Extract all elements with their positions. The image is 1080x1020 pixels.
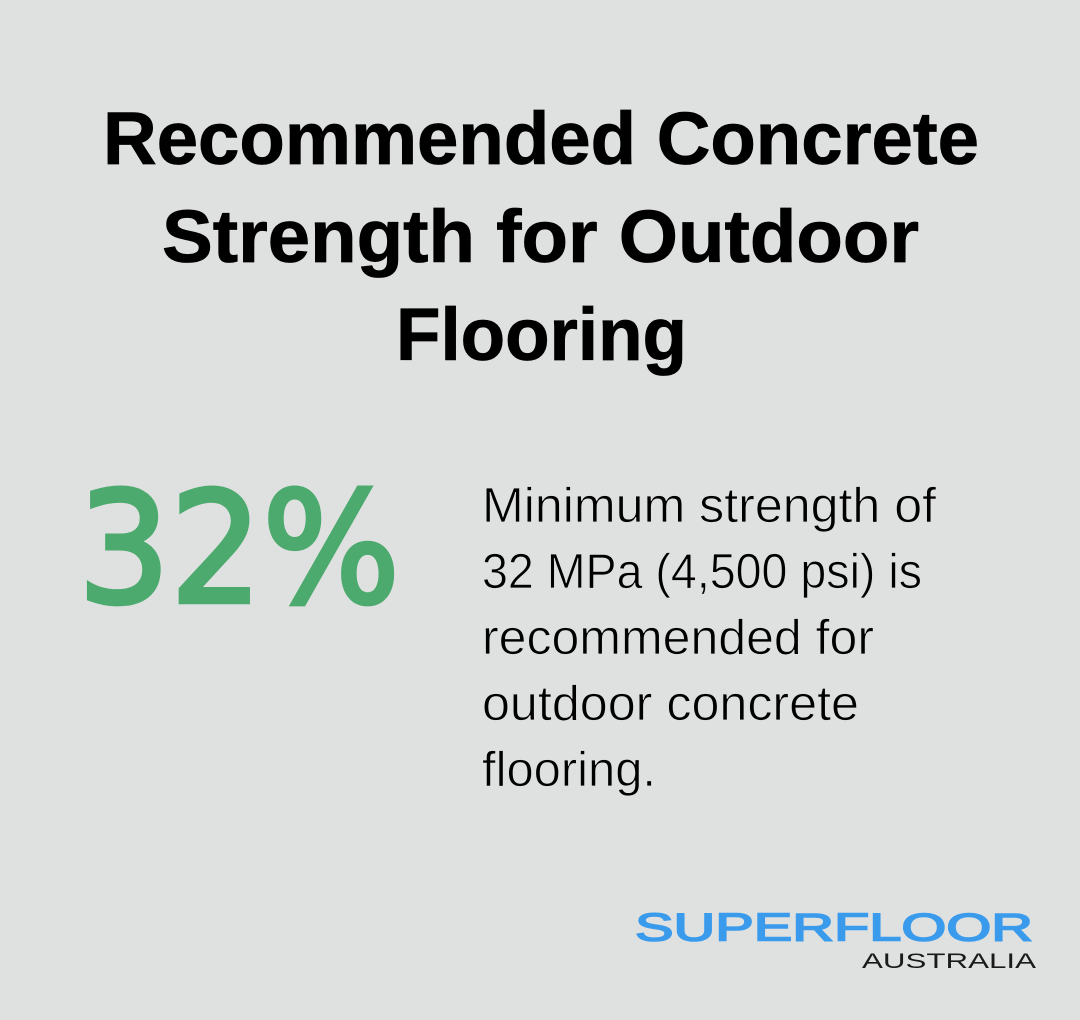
title: Strength for Outdoor bbox=[162, 195, 919, 278]
logo: Superfloor Australia: AUSTRALIA bbox=[862, 950, 1036, 973]
title bbox=[103, 97, 979, 376]
description text: 32 MPa (4,500 psi) is bbox=[482, 545, 922, 599]
description text: recommended for bbox=[482, 611, 874, 665]
logo: Superfloor Australia: SUPERFLOOR bbox=[635, 906, 1033, 950]
title: Recommended Concrete bbox=[103, 97, 979, 180]
description text: outdoor concrete bbox=[482, 677, 859, 731]
description text bbox=[482, 479, 936, 797]
statistic: 32%: 32% bbox=[78, 460, 400, 639]
logo: Superfloor Australia bbox=[635, 906, 1036, 973]
title: Flooring bbox=[396, 293, 687, 376]
description text: Minimum strength of bbox=[482, 479, 936, 533]
description text: flooring. bbox=[482, 743, 656, 797]
